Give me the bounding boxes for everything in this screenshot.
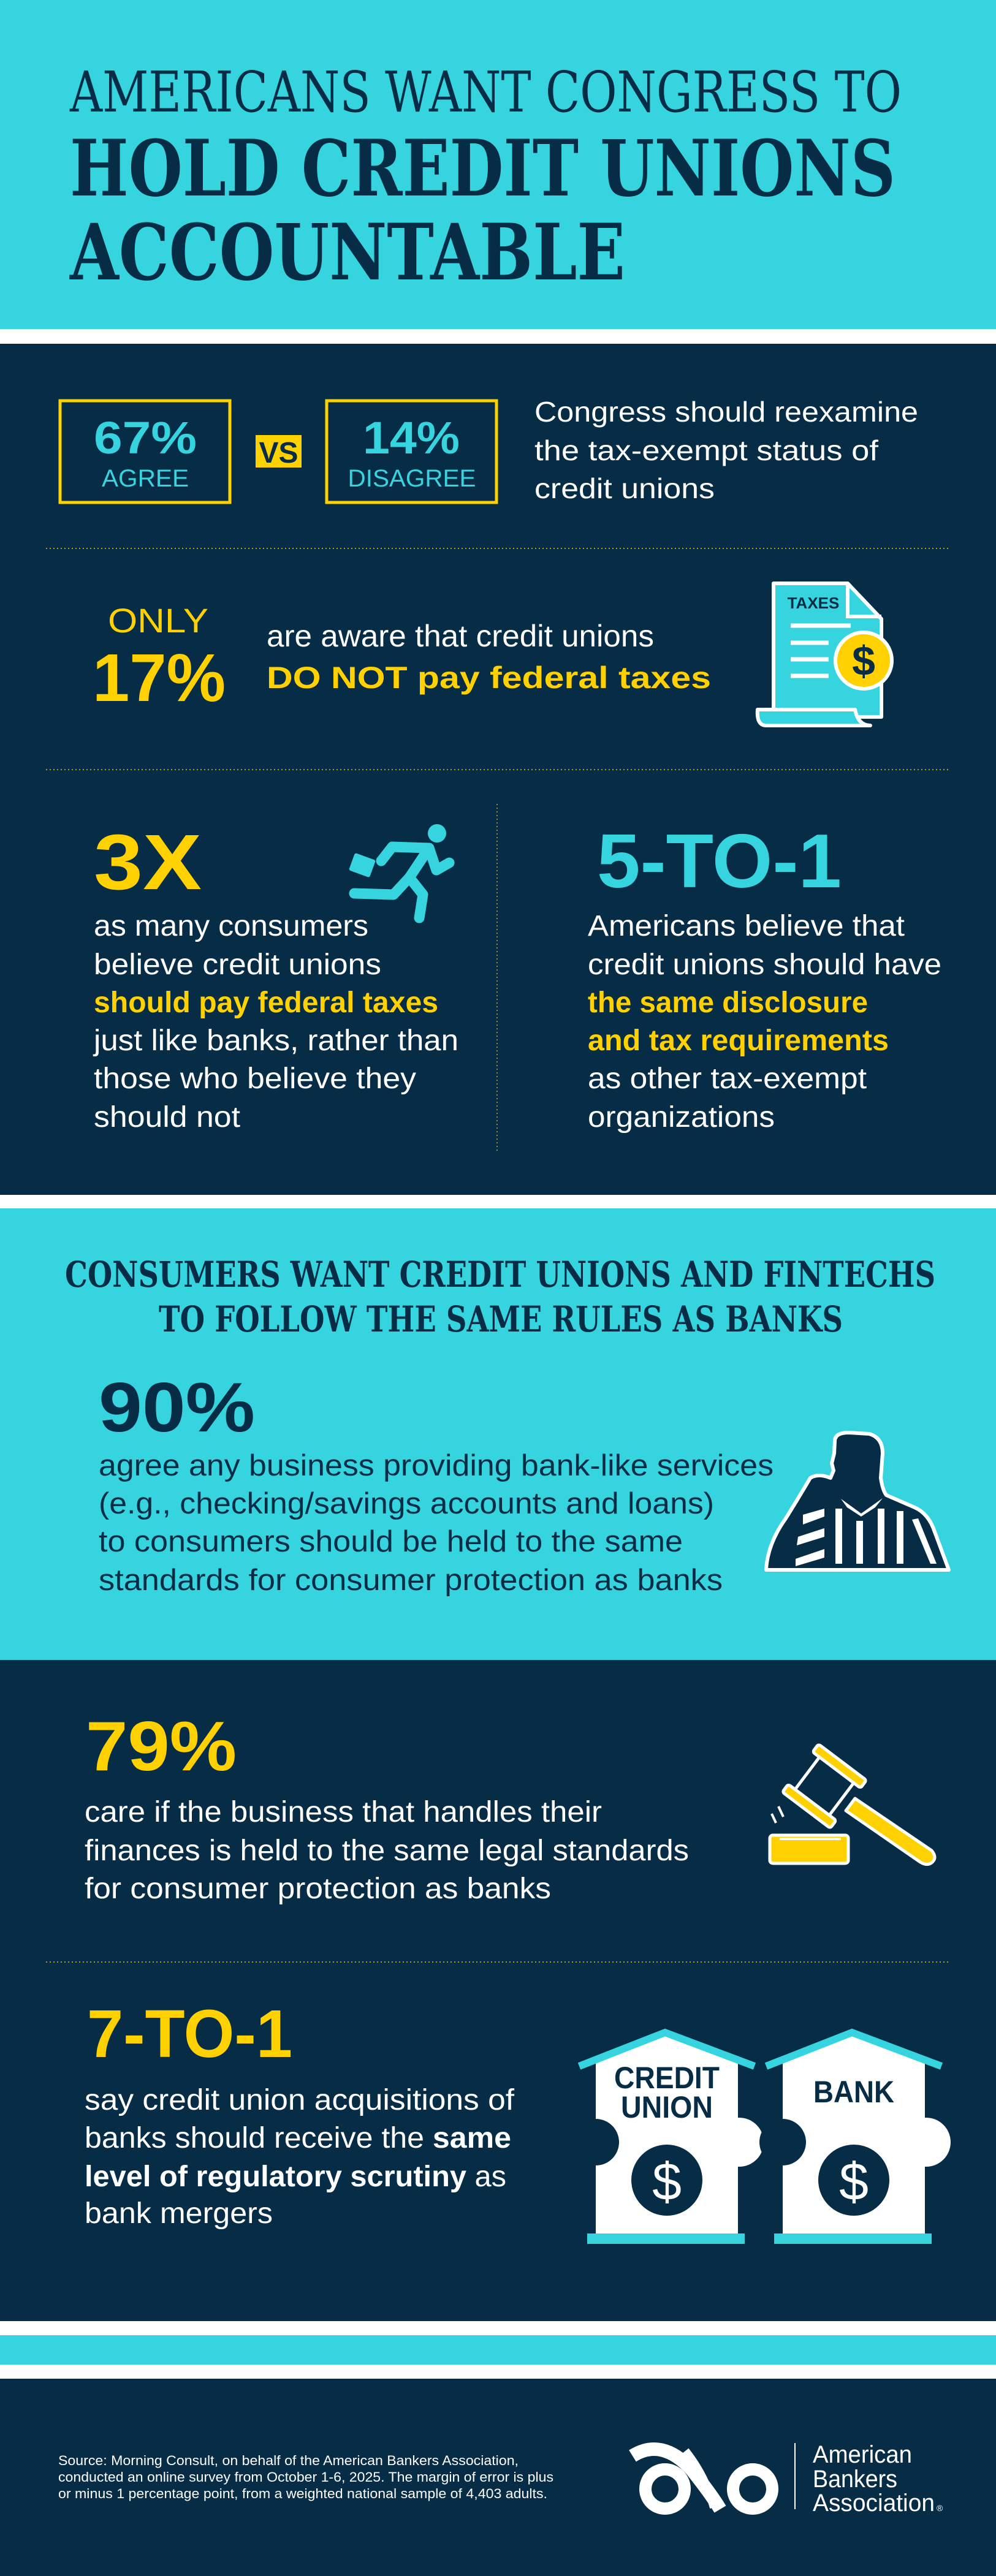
- source note: or minus 1 percentage point, from a weighted national sample of 4,403 adults.: [58, 2486, 547, 2501]
- stat: 90%: (e.g., checking/savings accounts and loans): [99, 1487, 714, 1520]
- stat: 79%: care if the business that handles their: [85, 1796, 602, 1828]
- house: credit union: UNION: [621, 2090, 713, 2124]
- source note: [58, 2453, 553, 2501]
- stat: only 17%: 17%: [93, 640, 226, 716]
- stat: 5-to-1: credit unions should have: [588, 949, 941, 981]
- stat: 67% agree vs 14% disagree: [60, 401, 496, 502]
- stat: 90%: [99, 1369, 774, 1597]
- house: credit union: [572, 2032, 764, 2244]
- stat: 90%: standards for consumer protection as banks: [99, 1564, 723, 1597]
- heading: consumers want same rules: TO FOLLOW THE SAME RULES AS BANKS: [159, 1298, 843, 1340]
- stat: 3X: 3X: [94, 819, 202, 906]
- icon: taxes document: [758, 583, 892, 725]
- stat: only 17%: [93, 601, 226, 716]
- icon: taxes document: $: [852, 638, 875, 684]
- stat: 67% agree vs 14% disagree: VS: [259, 437, 298, 469]
- stat: 7-to-1: level of regulatory scrutiny as: [85, 2161, 506, 2193]
- text: congress should reexamine: credit unions: [534, 472, 715, 504]
- logo: American Bankers Association: Bankers: [813, 2466, 897, 2493]
- stat: 5-to-1: [588, 819, 941, 1134]
- stat: 3X: just like banks, rather than: [93, 1025, 458, 1057]
- stat: 3X: believe credit unions: [94, 949, 381, 981]
- stat: 67% agree vs 14% disagree: 67%: [94, 412, 197, 463]
- heading: consumers want same rules: [65, 1254, 935, 1340]
- title: ACCOUNTABLE: [69, 207, 625, 298]
- source note: conducted an online survey from October 1-6, 2025. The margin of error is plus: [58, 2469, 553, 2485]
- house: credit union: $: [652, 2153, 682, 2211]
- stat: 7-to-1: bank mergers: [85, 2197, 273, 2230]
- icon: running person: [351, 824, 449, 918]
- panel: same rules section: [0, 1195, 996, 1660]
- stat: 67% agree vs 14% disagree: AGREE: [102, 465, 189, 492]
- stat: 3X: [93, 819, 458, 1134]
- icon: taxes document: TAXES: [788, 594, 839, 612]
- stat: 7-to-1: [85, 1996, 515, 2230]
- panel: legal standards section: [0, 1660, 996, 2321]
- house: bank: BANK: [813, 2075, 894, 2109]
- icon: referee: [766, 1433, 949, 1570]
- panel: tax-exempt section background: [0, 344, 996, 1195]
- text: congress should reexamine: the tax-exempt status of: [534, 434, 878, 466]
- stat: 3X: as many consumers: [94, 910, 368, 942]
- stat: 79%: 79%: [86, 1708, 237, 1786]
- stat: 7-to-1: 7-TO-1: [87, 1996, 292, 2072]
- text: congress should reexamine: [534, 396, 918, 504]
- text: congress should reexamine: Congress should reexamine: [534, 396, 918, 428]
- icon: credit union and bank puzzle houses: [572, 2032, 951, 2244]
- logo: American Bankers Association: [633, 2441, 943, 2517]
- stat: 5-to-1: Americans believe that: [588, 910, 905, 942]
- stat: 7-to-1: banks should receive the same: [85, 2122, 511, 2154]
- stat: 79%: finances is held to the same legal standards: [85, 1835, 689, 1867]
- house: bank: $: [839, 2153, 869, 2211]
- stat: 90%: to consumers should be held to the same: [99, 1525, 683, 1558]
- stat: 3X: those who believe they: [94, 1063, 416, 1095]
- title: [69, 59, 902, 298]
- stat: 3X: should not: [94, 1101, 240, 1134]
- stat: 3X: should pay federal taxes: [94, 987, 438, 1019]
- stat: 5-to-1: 5-TO-1: [597, 819, 842, 904]
- stat: 5-to-1: as other tax-exempt: [588, 1063, 867, 1095]
- header band: [0, 0, 996, 344]
- stat: 67% agree vs 14% disagree: DISAGREE: [348, 465, 476, 492]
- logo: American Bankers Association: American: [813, 2441, 912, 2468]
- logo: American Bankers Association: ®: [937, 2503, 943, 2513]
- stat: 90%: 90%: [99, 1369, 255, 1447]
- text: aware credit unions do not pay federal taxes: [267, 619, 711, 695]
- text: aware credit unions do not pay federal taxes: are aware that credit unions: [267, 619, 654, 653]
- text: aware credit unions do not pay federal taxes: DO NOT pay federal taxes: [267, 661, 711, 695]
- stat: 90%: agree any business providing bank-like services: [99, 1449, 774, 1482]
- stat: 5-to-1: organizations: [588, 1101, 775, 1134]
- stat: 5-to-1: the same disclosure: [588, 987, 868, 1019]
- logo: American Bankers Association: Association: [813, 2490, 935, 2517]
- stat: 67% agree vs 14% disagree: 14%: [363, 412, 460, 463]
- house: credit union: CREDIT: [614, 2061, 720, 2095]
- stat: 79%: [85, 1708, 689, 1905]
- stat: 79%: for consumer protection as banks: [85, 1873, 551, 1905]
- footer stripes: [0, 2321, 996, 2576]
- stat: 7-to-1: say credit union acquisitions of: [85, 2084, 515, 2116]
- icon: gavel: [770, 1744, 935, 1865]
- stat: only 17%: ONLY: [108, 601, 208, 640]
- source note: Source: Morning Consult, on behalf of the American Bankers Association,: [58, 2453, 519, 2468]
- house: bank: [759, 2032, 951, 2244]
- stat: 5-to-1: and tax requirements: [588, 1025, 889, 1057]
